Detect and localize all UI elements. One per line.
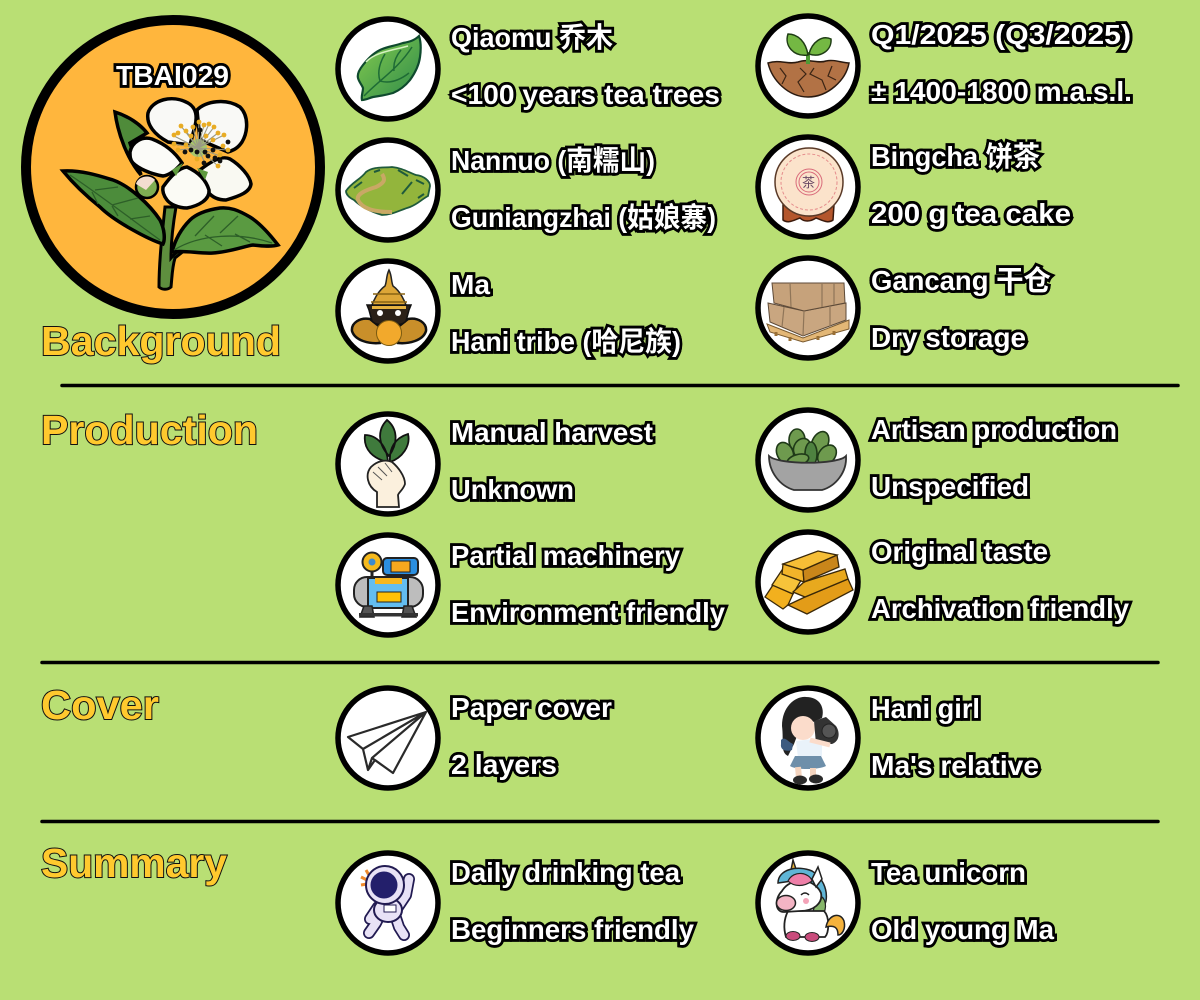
label: machinery: Partial machinery — [451, 540, 680, 571]
item: Artisan production — [758, 410, 1117, 510]
label: mountain: Nannuo (南糯山) — [451, 145, 655, 176]
section: Cover — [41, 682, 1039, 788]
item: Partial machinery — [338, 535, 725, 635]
icon: sprout in soil — [758, 16, 858, 116]
item: Tea unicorn — [758, 853, 1054, 953]
badge: TBAI029 tea flower — [26, 20, 320, 314]
label: archival: Archivation friendly — [871, 593, 1129, 624]
heading: Summary: Summary — [41, 840, 227, 886]
label: audience: Beginners friendly — [451, 914, 694, 945]
icon: hand holding tea leaves — [338, 414, 438, 514]
item: Nannuo — [338, 140, 716, 240]
label: environment: Environment friendly — [451, 597, 725, 628]
item: Daily drinking tea — [338, 853, 694, 953]
label: verdict: Old young Ma — [871, 914, 1054, 945]
label: altitude: ± 1400-1800 m.a.s.l. — [871, 76, 1132, 107]
label: character: Tea unicorn — [871, 857, 1026, 888]
label: harvest method: Manual harvest — [451, 417, 653, 448]
label: taste: Original taste — [871, 536, 1048, 567]
section: Background — [26, 16, 1132, 364]
icon: bowl of tea leaves — [758, 410, 858, 510]
item: Manual harvest — [338, 414, 653, 514]
icon: golden guardian with orb — [338, 261, 438, 361]
item: Paper cover — [338, 688, 612, 788]
label: harvest detail: Unknown — [451, 474, 574, 505]
label: harvest period: Q1/2025 (Q3/2025) — [871, 19, 1131, 50]
label: storage type: Dry storage — [871, 322, 1026, 353]
label: producer: Ma — [451, 269, 490, 300]
label: cover art: Hani girl — [871, 693, 980, 724]
label: production: Artisan production — [871, 414, 1117, 445]
icon: pump machine — [338, 535, 438, 635]
icon: boxes on pallet — [758, 258, 858, 358]
heading: Production: Production — [41, 407, 258, 453]
label: village: Guniangzhai (姑娘寨) — [451, 202, 716, 233]
section: Production — [41, 407, 1129, 635]
item: Bingcha — [758, 137, 1071, 237]
label: tea use: Daily drinking tea — [451, 857, 680, 888]
label: tea form: Bingcha 饼茶 — [871, 141, 1040, 172]
item: Qiaomu — [338, 19, 720, 119]
icon: paper plane — [338, 688, 438, 788]
icon: gold bars — [758, 532, 858, 632]
label: relation: Ma's relative — [871, 750, 1039, 781]
heading: Background: Background — [41, 318, 281, 364]
label: storage term: Gancang 干仓 — [871, 265, 1051, 296]
icon: tea cake on stand — [758, 137, 858, 237]
label: tribe: Hani tribe (哈尼族) — [451, 326, 681, 357]
heading: Cover: Cover — [41, 682, 159, 728]
label: production detail: Unspecified — [871, 471, 1029, 502]
icon: unicorn — [758, 853, 858, 953]
item: Hani girl — [758, 688, 1039, 788]
label: tree type: Qiaomu 乔木 — [451, 22, 613, 53]
icon: mountain terrain — [338, 140, 438, 240]
icon: green leaf — [338, 19, 438, 119]
label: tree age: <100 years tea trees — [451, 79, 720, 110]
item: harvest date — [758, 16, 1132, 116]
item: Ma — [338, 261, 681, 361]
label: weight: 200 g tea cake — [871, 198, 1071, 229]
tea character stamp: 茶 — [802, 175, 815, 190]
icon: girl with camera — [758, 688, 858, 788]
section: Summary — [41, 840, 1054, 953]
label: layers: 2 layers — [451, 749, 557, 780]
label: cover: Paper cover — [451, 692, 612, 723]
icon: astronaut — [338, 853, 438, 953]
item: Gancang — [758, 258, 1051, 358]
item: Original taste — [758, 532, 1129, 632]
badge label: TBAI029 — [116, 60, 229, 91]
illustration: tea flower — [63, 99, 278, 289]
